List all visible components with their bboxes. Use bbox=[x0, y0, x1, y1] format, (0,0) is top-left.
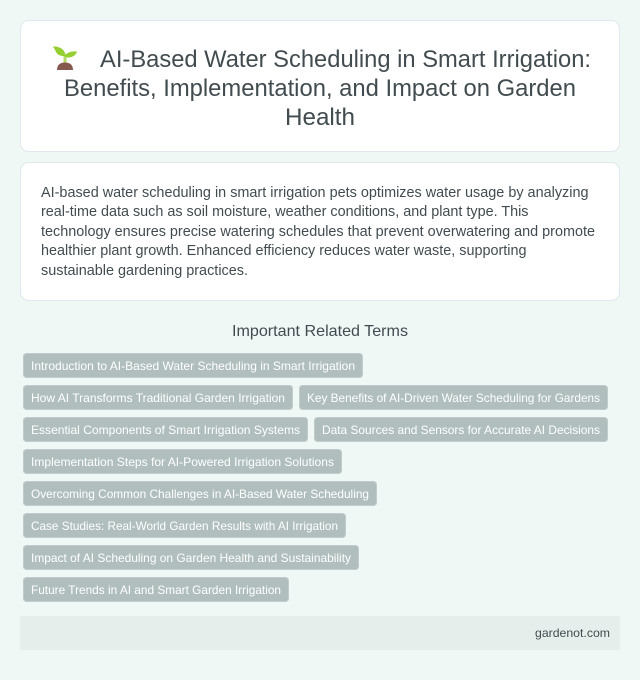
chip: Case Studies: Real-World Garden Results with AI Irrigation bbox=[31, 519, 338, 533]
chip bbox=[314, 418, 608, 442]
chip: Essential Components of Smart Irrigation Systems bbox=[31, 423, 300, 437]
panel: title card bbox=[20, 20, 620, 152]
footer bbox=[20, 616, 620, 650]
chip bbox=[24, 482, 376, 506]
chip: Data Sources and Sensors for Accurate AI Decisions bbox=[322, 423, 600, 437]
summary text: technology ensures precise watering schedules that prevent overwatering and promote bbox=[41, 224, 595, 240]
summary text: healthier plant growth. Enhanced efficiency reduces water waste, supporting bbox=[41, 243, 526, 259]
heading: important related terms: Important Related Terms bbox=[232, 323, 408, 340]
chip: How AI Transforms Traditional Garden Irrigation bbox=[31, 391, 285, 405]
chip bbox=[24, 354, 362, 378]
panel: summary bbox=[20, 162, 620, 300]
chip bbox=[24, 450, 342, 474]
chip: Future Trends in AI and Smart Garden Irrigation bbox=[31, 583, 281, 597]
summary text: sustainable gardening practices. bbox=[41, 263, 248, 279]
chip: Introduction to AI-Based Water Scheduling in Smart Irrigation bbox=[31, 359, 355, 373]
title: Benefits, Implementation, and Impact on Garden bbox=[64, 75, 576, 102]
title: Health bbox=[285, 104, 355, 131]
title bbox=[64, 46, 591, 131]
title: AI-Based Water Scheduling in Smart Irrigation: bbox=[100, 46, 591, 73]
icon: sprout bbox=[53, 46, 77, 70]
chip: Key Benefits of AI-Driven Water Scheduling for Gardens bbox=[307, 391, 600, 405]
chip bbox=[24, 418, 308, 442]
related term chips bbox=[24, 354, 608, 602]
chip bbox=[24, 514, 346, 538]
chip: Overcoming Common Challenges in AI-Based Water Scheduling bbox=[31, 487, 369, 501]
summary text bbox=[41, 185, 595, 279]
summary text: real-time data such as soil moisture, weather conditions, and plant type. This bbox=[41, 204, 528, 220]
chip bbox=[300, 386, 608, 410]
chip: Impact of AI Scheduling on Garden Health and Sustainability bbox=[31, 551, 351, 565]
chip bbox=[24, 386, 292, 410]
chip bbox=[24, 578, 288, 602]
footer: gardenot.com bbox=[535, 626, 610, 640]
chip: Implementation Steps for AI-Powered Irrigation Solutions bbox=[31, 455, 334, 469]
summary text: AI-based water scheduling in smart irrigation pets optimizes water usage by analyzing bbox=[41, 185, 588, 201]
chip bbox=[24, 546, 358, 570]
